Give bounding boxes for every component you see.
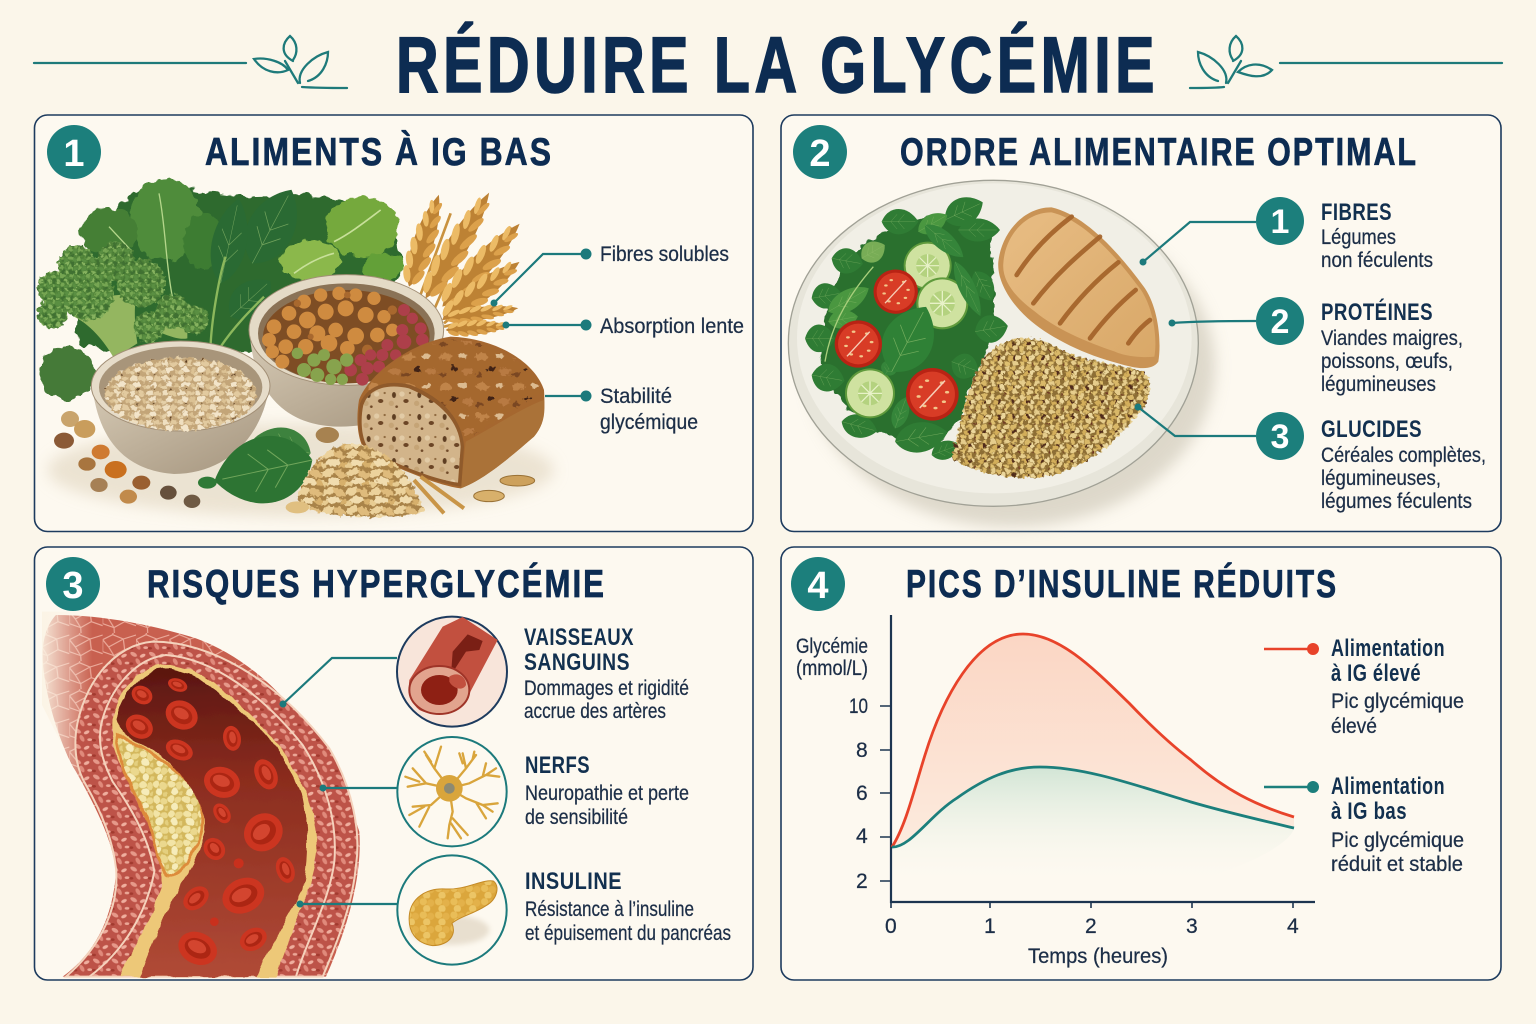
- step 2 badge: [1256, 297, 1304, 345]
- badge 3: [46, 557, 100, 611]
- connector: vaisseaux: [280, 658, 397, 708]
- pancreas inset: [397, 855, 507, 965]
- leafy greens: [77, 178, 403, 357]
- label: fibres solubles: Fibres solubles: [600, 243, 729, 266]
- heading: risques: RISQUES HYPERGLYCÉMIE: [147, 562, 606, 606]
- wheat sheaf: [395, 185, 531, 339]
- legend: high GI: Pic glycémique: [1331, 690, 1464, 713]
- red blood cells: [121, 676, 298, 971]
- lumen: [116, 668, 307, 977]
- text: nerfs: Neuropathie et perte: [525, 782, 689, 805]
- y axis labels: 4: [856, 825, 868, 848]
- legend: low GI: réduit et stable: [1331, 853, 1463, 876]
- connector: absorption lente: [502, 320, 592, 330]
- panel: aliments a IG bas: [34, 115, 753, 532]
- x axis labels: 3: [1186, 915, 1198, 938]
- text: nerfs: [525, 752, 689, 829]
- heading: pics: PICS D’INSULINE RÉDUITS: [906, 562, 1338, 606]
- text: nerfs: de sensibilité: [525, 806, 628, 829]
- yellow plaque layer: [111, 665, 318, 977]
- panel: ordre alimentaire: [781, 115, 1501, 532]
- plaque deposit: [116, 735, 203, 877]
- step 3 text: Céréales complètes,: [1321, 444, 1486, 467]
- y axis labels: [796, 635, 868, 893]
- label: absorption lente: Absorption lente: [600, 315, 744, 338]
- connector: nerfs: [320, 784, 397, 792]
- badge 3: 3: [62, 565, 84, 607]
- connector: fibres solubles: [490, 248, 592, 306]
- step 2 text: poissons, œufs,: [1321, 350, 1453, 373]
- step 3 badge: 3: [1271, 418, 1289, 456]
- step 3 text: GLUCIDES: [1321, 416, 1422, 443]
- panel: pics d'insuline: [781, 547, 1501, 980]
- legend: low GI: [1264, 773, 1464, 876]
- step 3 text: [1321, 416, 1486, 513]
- connector: stabilite glycemique: [545, 390, 592, 402]
- text: insuline: Résistance à l’insuline: [525, 898, 694, 921]
- text: insuline: INSULINE: [525, 868, 622, 895]
- step 1 text: non féculents: [1321, 249, 1433, 272]
- legend: high GI: Alimentation: [1331, 635, 1445, 662]
- step 1 text: [1321, 199, 1433, 272]
- badge 4: [791, 557, 845, 611]
- y axis labels: (mmol/L): [796, 657, 868, 680]
- teal curve: low GI: [892, 767, 1294, 847]
- connector: fibres: [1140, 222, 1256, 266]
- illustration: artery cross-section: [42, 612, 507, 977]
- step 2 text: PROTÉINES: [1321, 298, 1433, 326]
- badge 4: 4: [807, 565, 829, 607]
- step 1 text: Légumes: [1321, 226, 1396, 249]
- red curve: high GI: [892, 634, 1294, 847]
- header ornament left: [34, 36, 347, 88]
- label: stabilite glycemique: [600, 385, 698, 434]
- artery wall: [66, 642, 357, 977]
- step 2 text: légumineuses: [1321, 373, 1436, 396]
- x axis labels: 1: [984, 915, 996, 938]
- inner membrane: [89, 655, 335, 977]
- text: vaisseaux sanguins: SANGUINS: [524, 649, 630, 676]
- step 3 text: légumes féculents: [1321, 490, 1472, 513]
- bowl of legumes: [249, 275, 444, 427]
- connector: glucides: [1134, 404, 1256, 436]
- rolled oats: [286, 427, 535, 517]
- text: nerfs: NERFS: [525, 752, 590, 779]
- connector: insuline: [296, 900, 397, 908]
- legend: low GI: à IG bas: [1331, 798, 1407, 825]
- text: insuline: [525, 868, 731, 945]
- broccoli: [37, 242, 209, 401]
- grilled chicken: [998, 207, 1160, 368]
- legend: high GI: [1264, 635, 1464, 738]
- legend: high GI: à IG élevé: [1331, 660, 1421, 687]
- spinach leaves: [198, 420, 319, 513]
- step 2 badge: 2: [1271, 303, 1289, 341]
- y axis labels: Glycémie: [796, 635, 868, 658]
- step 2 text: Viandes maigres,: [1321, 327, 1463, 350]
- salad: [805, 190, 1010, 464]
- x axis labels: [885, 915, 1299, 968]
- heading: aliments: ALIMENTS À IG BAS: [205, 130, 553, 174]
- x axis labels: Temps (heures): [1028, 945, 1168, 968]
- badge 2: 2: [809, 133, 831, 175]
- line chart: [796, 615, 1315, 968]
- connector: proteines: [1168, 320, 1256, 326]
- y axis labels: 8: [856, 739, 868, 762]
- step 3 badge: [1256, 412, 1304, 460]
- x axis labels: 4: [1287, 915, 1299, 938]
- scattered lentils: [54, 411, 200, 508]
- vessel inset: [397, 617, 507, 727]
- step 1 badge: [1256, 197, 1304, 245]
- bowl of grains: [91, 341, 270, 474]
- panel: risques hyperglycemie: [34, 547, 753, 980]
- text: vaisseaux sanguins: [524, 624, 689, 723]
- header ornament right: [1190, 36, 1502, 88]
- text: insuline: et épuisement du pancréas: [525, 922, 731, 945]
- legend: low GI: Alimentation: [1331, 773, 1445, 800]
- label: stabilite glycemique: Stabilité: [600, 385, 672, 408]
- badge 1: [47, 125, 101, 179]
- quinoa: [952, 338, 1150, 478]
- illustration: low GI foods: [37, 178, 554, 517]
- illustration: plate: [788, 180, 1215, 527]
- legend: low GI: Pic glycémique: [1331, 829, 1464, 852]
- badge 2: [793, 125, 847, 179]
- wholegrain bread: [357, 337, 544, 488]
- x axis labels: 2: [1085, 915, 1097, 938]
- x axis labels: 0: [885, 915, 897, 938]
- title: RÉDUIRE LA GLYCÉMIE: [396, 20, 1159, 109]
- step 1 text: FIBRES: [1321, 199, 1392, 226]
- step 3 text: légumineuses,: [1321, 467, 1441, 490]
- legend: high GI: élevé: [1331, 715, 1377, 738]
- y axis labels: 10: [849, 695, 868, 718]
- step 1 badge: 1: [1271, 203, 1289, 241]
- nerve cell inset: [397, 737, 507, 846]
- text: vaisseaux sanguins: VAISSEAUX: [524, 624, 634, 651]
- text: vaisseaux sanguins: Dommages et rigidité: [524, 677, 689, 700]
- y axis labels: 2: [856, 870, 868, 893]
- y axis labels: 6: [856, 782, 868, 805]
- step 2 text: [1321, 298, 1463, 396]
- label: stabilite glycemique: glycémique: [600, 411, 698, 434]
- badge 1: 1: [63, 133, 85, 175]
- text: vaisseaux sanguins: accrue des artères: [524, 700, 666, 723]
